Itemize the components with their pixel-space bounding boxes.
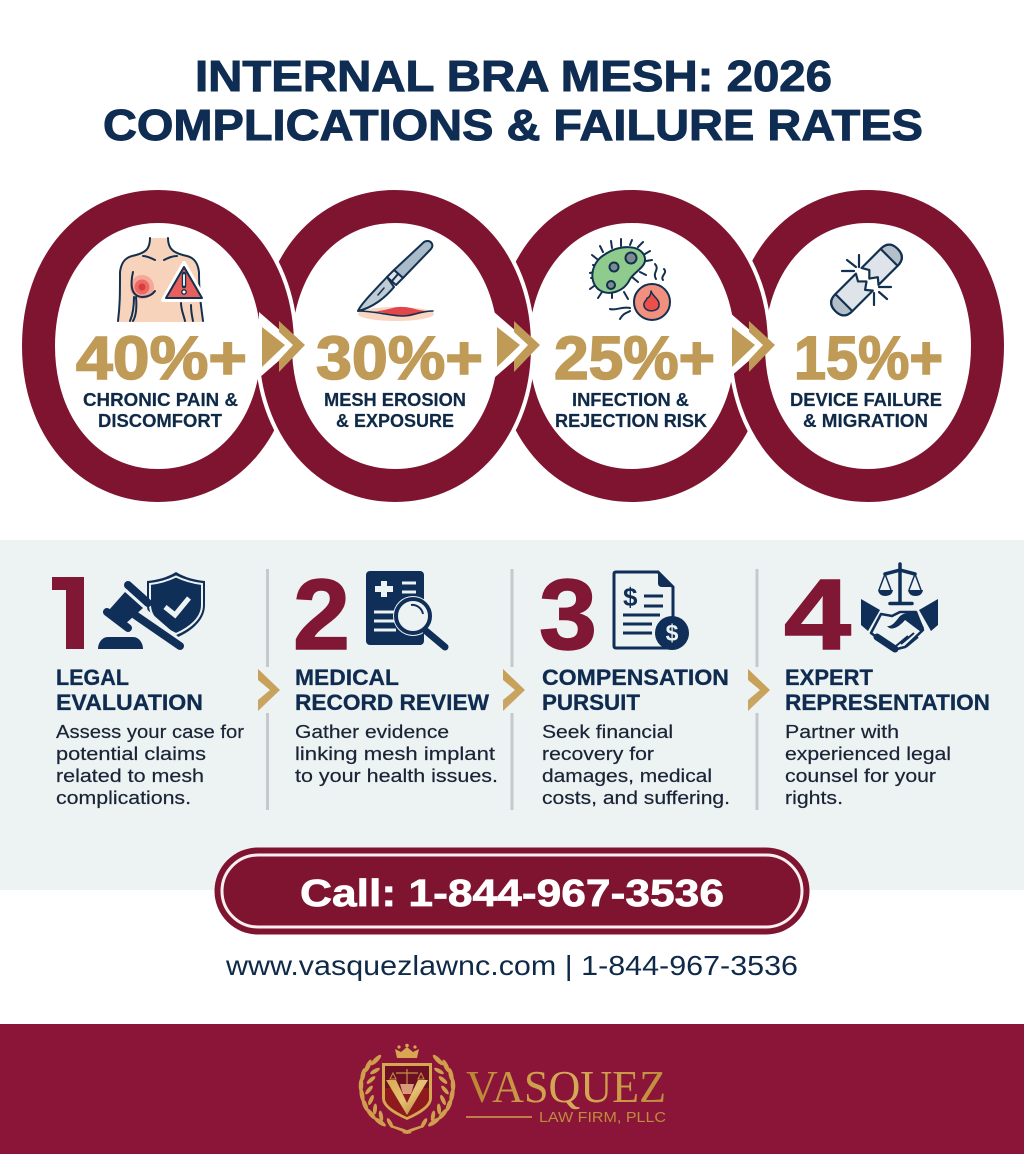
body text: recovery for — [542, 743, 654, 764]
step number 1: 1 — [39, 559, 104, 671]
heading: EXPERT — [785, 665, 873, 690]
body text: to your health issues. — [295, 765, 498, 786]
logo: Vasquez Law Firm: LAW FIRM, PLLC — [539, 1110, 666, 1126]
stat: 40%+ chronic pain — [76, 324, 247, 431]
stat: 40%+ chronic pain: CHRONIC PAIN & — [83, 389, 238, 410]
icon: scalpel and incision — [358, 241, 434, 321]
body text: costs, and suffering. — [542, 787, 730, 808]
wordmark: VASQUEZ — [466, 1061, 666, 1112]
stat: 30%+ mesh erosion — [316, 324, 483, 431]
stat: 15%+ device failure — [790, 324, 943, 431]
title: INTERNAL BRA MESH: 2026 — [195, 52, 832, 101]
heading — [542, 665, 729, 715]
step number 4: 4 — [784, 559, 851, 671]
footer band — [0, 1024, 1024, 1154]
stat: 15%+ device failure: 15%+ — [794, 324, 943, 392]
step number 1 — [52, 577, 84, 649]
step number 2: 2 — [293, 559, 350, 671]
heading: EVALUATION — [56, 690, 203, 715]
body text — [56, 721, 244, 808]
icon: scales and handshake — [861, 564, 938, 650]
shield — [382, 1063, 432, 1120]
heading: PURSUIT — [542, 690, 640, 715]
step 2: medical record review — [293, 559, 498, 786]
body text: Partner with — [785, 721, 899, 742]
crown — [395, 1044, 419, 1058]
stat: 25%+ infection: 25%+ — [554, 324, 715, 392]
body text: counsel for your — [785, 765, 936, 786]
heading: RECORD REVIEW — [295, 690, 490, 715]
icon: bacteria and flame — [590, 239, 670, 320]
chevron arrows between steps — [258, 669, 770, 711]
body text: Gather evidence — [295, 721, 449, 742]
heading — [295, 665, 490, 715]
body text: rights. — [785, 787, 843, 808]
heading — [56, 665, 203, 715]
interlocked maroon rings — [38, 206, 988, 486]
icon: medical record and magnifier — [366, 571, 445, 647]
icon: invoice and coin: $ — [666, 620, 679, 646]
stat: 40%+ chronic pain: 40%+ — [76, 324, 247, 392]
icon: torso with pain and warning — [118, 238, 205, 322]
stat: 30%+ mesh erosion: 30%+ — [316, 324, 483, 392]
body text: Seek financial — [542, 721, 673, 742]
laurel wreath — [358, 1053, 456, 1134]
heading: COMPENSATION — [542, 665, 729, 690]
arrow: stat 2 to stat 3 — [494, 312, 540, 378]
body text: experienced legal — [785, 743, 951, 764]
stat: 15%+ device failure: & MIGRATION — [803, 410, 928, 431]
title — [103, 52, 923, 150]
step number 3: 3 — [539, 559, 597, 671]
call button — [214, 848, 810, 934]
icon: invoice and coin — [614, 572, 689, 650]
panel: legal process band — [0, 540, 1024, 890]
stat: 40%+ chronic pain: DISCOMFORT — [98, 410, 223, 431]
call button: Call: 1-844-967-3536 — [300, 873, 724, 915]
heading: REPRESENTATION — [785, 690, 990, 715]
stat: 15%+ device failure: DEVICE FAILURE — [790, 389, 942, 410]
arrow: stat 3 to stat 4 — [729, 312, 775, 378]
body text: damages, medical — [542, 765, 712, 786]
heading: LEGAL — [56, 665, 129, 690]
body text: related to mesh — [56, 765, 204, 786]
website and phone line: www.vasquezlawnc.com | 1-844-967-3536 — [225, 950, 798, 981]
stat: 25%+ infection: INFECTION & — [572, 389, 689, 410]
body text: potential claims — [56, 743, 206, 764]
stat: 25%+ infection: REJECTION RISK — [555, 410, 708, 431]
body text: linking mesh implant — [295, 743, 495, 764]
icon: gavel and shield — [98, 572, 205, 649]
logo: Vasquez Law Firm — [358, 1044, 666, 1134]
body text — [785, 721, 951, 808]
stat: 30%+ mesh erosion: & EXPOSURE — [336, 410, 454, 431]
heading: MEDICAL — [295, 665, 399, 690]
icon: invoice and coin: $ — [623, 582, 638, 612]
stat: 25%+ infection — [554, 324, 715, 431]
arrow: stat 1 to stat 2 — [259, 312, 305, 378]
step 3: compensation pursuit — [539, 559, 730, 808]
body text — [542, 721, 730, 808]
body text — [295, 721, 498, 786]
step 4: expert representation — [784, 559, 990, 808]
stat: 30%+ mesh erosion: MESH EROSION — [324, 389, 466, 410]
icon: broken implant device — [827, 240, 906, 320]
step 1: legal evaluation — [52, 572, 244, 808]
body text: Assess your case for — [56, 721, 244, 742]
body text: complications. — [56, 787, 191, 808]
heading — [785, 665, 990, 715]
title: COMPLICATIONS & FAILURE RATES — [103, 101, 923, 150]
